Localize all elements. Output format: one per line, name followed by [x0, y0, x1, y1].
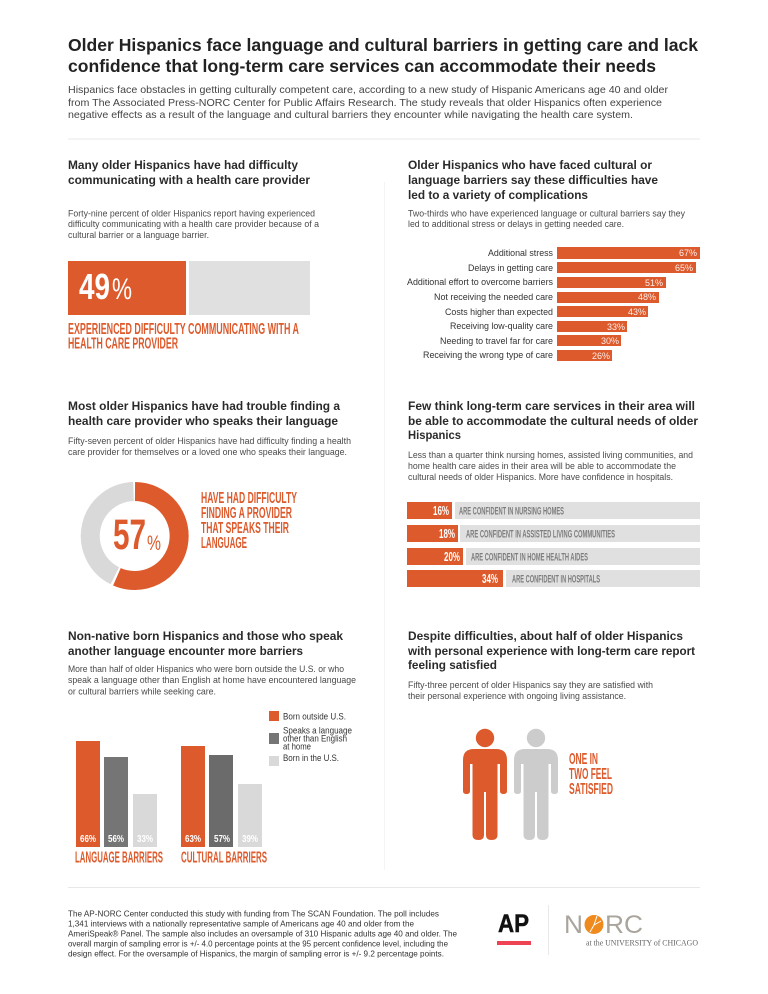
heading: satisfaction [407, 630, 695, 672]
column chart: language barriers: 33% [137, 833, 154, 845]
body text: two-thirds [408, 208, 686, 229]
column chart: language barriers: 56% [108, 833, 125, 845]
legend: Born in the U.S. [283, 753, 339, 763]
bar chart: complications [407, 247, 700, 361]
callout: one in two feel satisfied: TWO FEEL [569, 766, 612, 783]
footer methodology text: The AP-NORC Center conducted this study with funding from The SCAN Foundation. The poll includes [68, 908, 439, 918]
bar chart: complications: Receiving the wrong type of care [423, 350, 553, 360]
footer methodology text: design effect. For the oversample of Hispanics, the margin of sampling error is +/- 9.2 percentage points. [68, 948, 444, 958]
body text: more than half: or cultural barriers while seeking care. [68, 686, 216, 696]
heading: satisfaction: with personal experience with long-term care report [407, 645, 695, 658]
logo: NORC at the University of Chicago: at the UNIVERSITY of CHICAGO [586, 938, 698, 948]
stacked bars: confidence by facility: 18% [439, 527, 455, 541]
stacked bars: confidence by facility: ARE CONFIDENT IN HOSPITALS [512, 574, 600, 586]
legend [269, 711, 352, 766]
legend: Born outside U.S. [283, 712, 346, 722]
icon: satisfied person [463, 729, 507, 840]
bar chart: complications: 43% [628, 307, 646, 317]
callout: have had difficulty: HAVE HAD DIFFICULTY [201, 490, 297, 507]
heading: complications: language barriers say these difficulties have [408, 174, 659, 187]
bar chart: complications: 33% [607, 322, 625, 332]
stacked bars: confidence by facility: 20% [444, 550, 460, 564]
legend: at home [283, 742, 311, 752]
column chart: cultural barriers [181, 746, 267, 866]
bar chart: complications: Additional stress [488, 248, 554, 258]
body text: forty-nine percent: Forty-nine percent of older Hispanics report having experienced [68, 208, 315, 218]
logo: NORC at the University of Chicago: N [564, 911, 583, 939]
stacked bars: confidence by facility [407, 502, 700, 587]
logo: NORC at the University of Chicago: RC [605, 911, 643, 939]
callout: experienced difficulty [68, 321, 299, 352]
heading: satisfaction: Despite difficulties, about half of older Hispanics [408, 630, 683, 643]
callout: have had difficulty: FINDING A PROVIDER [201, 505, 292, 522]
progress bar: 49 percent: 49 [79, 266, 110, 307]
body text: less than a quarter: Less than a quarter think nursing homes, assisted living communities, and [408, 450, 693, 460]
footer methodology text: AmeriSpeak® Panel. The sample also includes an oversample of 310 Hispanic adults age 40 and older. The [68, 928, 457, 938]
heading: satisfaction: feeling satisfied [408, 659, 497, 672]
body text: two-thirds: Two-thirds who have experienced language or cultural barriers say they [408, 208, 686, 218]
body text: less than a quarter: home health care aides in their area will be able to accommodate the [408, 461, 676, 471]
heading: long-term care confidence: Few think long-term care services in their area will [408, 400, 695, 413]
progress bar: 49 percent [68, 261, 310, 315]
heading: difficulty communicating: Many older Hispanics have had difficulty [68, 159, 299, 172]
panel: satisfaction [407, 630, 695, 840]
body text: forty-nine percent: cultural barrier or a language barrier. [68, 230, 209, 240]
callout: experienced difficulty: EXPERIENCED DIFFICULTY COMMUNICATING WITH A [68, 321, 299, 338]
panel: finding a provider [68, 400, 351, 580]
body text: less than a quarter [408, 450, 693, 482]
title: Older Hispanics face language and cultural barriers in getting care and lack [68, 35, 698, 55]
body text: more than half: speak a language other than English at home have encountered language [68, 675, 356, 685]
panel: barriers by origin [68, 630, 356, 866]
bar chart: complications: Additional effort to overcome barriers [407, 277, 554, 287]
heading: complications: Older Hispanics who have faced cultural or [408, 159, 652, 172]
body text: two-thirds: led to additional stress or delays in getting needed care. [408, 219, 624, 229]
body text: forty-nine percent [68, 208, 319, 240]
body text: less than a quarter: cultural needs of older Hispanics. More have confidence in hospitals. [408, 472, 673, 482]
heading: barriers by origin [68, 630, 344, 658]
bar chart: complications: 26% [592, 351, 610, 361]
intro text [68, 85, 669, 121]
stacked bars: confidence by facility: 16% [433, 504, 449, 518]
heading: long-term care confidence: Hispanics [408, 429, 461, 442]
panel: difficulty communicating [68, 159, 319, 352]
stacked bars: confidence by facility: ARE CONFIDENT IN ASSISTED LIVING COMMUNITIES [466, 528, 615, 540]
bar chart: complications: 51% [645, 278, 663, 288]
column chart: language barriers [75, 741, 163, 866]
logo: NORC at the University of Chicago [564, 911, 698, 948]
body text: fifty-three percent: their personal experience with ongoing living assistance. [408, 691, 626, 701]
heading: complications [408, 159, 659, 202]
heading: long-term care confidence [408, 400, 698, 442]
heading: difficulty communicating: communicating with a health care provider [68, 174, 310, 187]
callout: have had difficulty: LANGUAGE [201, 535, 247, 552]
heading: finding a provider: health care provider who speaks their language [68, 415, 339, 428]
column chart: cultural barriers: 63% [185, 833, 202, 845]
body text: fifty-seven percent: care provider for themselves or a loved one who speaks their language. [68, 447, 347, 457]
donut chart: 57 percent: % [147, 532, 161, 555]
title: confidence that long-term care services can accommodate their needs [68, 56, 656, 76]
heading: complications: led to a variety of complications [408, 189, 588, 202]
bar chart: complications: Delays in getting care [468, 263, 553, 273]
bar chart: complications: Receiving low-quality care [450, 321, 553, 331]
column chart: cultural barriers: 57% [214, 833, 231, 845]
bar chart: complications: Needing to travel far for care [440, 336, 553, 346]
donut chart: 57 percent [90, 492, 179, 580]
icon: unsatisfied person [514, 729, 558, 840]
heading: finding a provider: Most older Hispanics have had trouble finding a [68, 400, 341, 413]
logo: AP: AP [498, 910, 529, 938]
legend: other than English [283, 734, 347, 744]
title [68, 35, 698, 76]
footer methodology text [68, 908, 457, 958]
stacked bars: confidence by facility: ARE CONFIDENT IN NURSING HOMES [459, 506, 564, 518]
footer methodology text: 1,341 interviews with a nationally representative sample of Americans age 40 and older from the [68, 918, 414, 928]
body text: fifty-seven percent: Fifty-seven percent of older Hispanics have had difficulty finding a health [68, 436, 351, 446]
callout: one in two feel satisfied: SATISFIED [569, 781, 613, 798]
bar chart: complications: 65% [675, 263, 693, 273]
heading: long-term care confidence: be able to accommodate the cultural needs of older [408, 415, 698, 428]
intro text: Hispanics face obstacles in getting culturally competent care, according to a new study of Hispanic Americans age 40 and older [68, 85, 669, 96]
bar chart: complications: Costs higher than expected [445, 307, 553, 317]
panel: long-term care confidence [407, 400, 700, 587]
legend: Speaks a language [283, 726, 352, 736]
callout: have had difficulty [201, 490, 297, 552]
callout: experienced difficulty: HEALTH CARE PROVIDER [68, 336, 178, 352]
bar chart: complications: 48% [638, 292, 656, 302]
heading: finding a provider [68, 400, 341, 428]
donut chart: 57 percent: 57 [113, 511, 146, 559]
bar chart: complications: 30% [601, 336, 619, 346]
column chart: cultural barriers: CULTURAL BARRIERS [181, 850, 267, 866]
heading: barriers by origin: another language encounter more barriers [68, 645, 303, 658]
stacked bars: confidence by facility: ARE CONFIDENT IN HOME HEALTH AIDES [471, 552, 588, 564]
callout: have had difficulty: THAT SPEAKS THEIR [201, 520, 289, 537]
body text: forty-nine percent: difficulty communicating with a health care provider because of a [68, 219, 319, 229]
body text: more than half: More than half of older Hispanics who were born outside the U.S. or who [68, 664, 344, 674]
panel: complications [407, 159, 700, 361]
body text: more than half [68, 664, 356, 696]
callout: one in two feel satisfied: ONE IN [569, 751, 598, 768]
column chart: cultural barriers: 39% [242, 833, 259, 845]
body text: fifty-three percent: Fifty-three percent of older Hispanics say they are satisfied with [408, 680, 653, 690]
intro text: from The Associated Press-NORC Center for Public Affairs Research. The study reveals that older Hispanics often experience [68, 98, 662, 109]
column chart: language barriers: 66% [80, 833, 97, 845]
footer methodology text: overall margin of sampling error is +/- 4.0 percentage points at the 95 percent confidence level, including the [68, 938, 448, 948]
progress bar: 49 percent: % [112, 273, 132, 306]
heading: barriers by origin: Non-native born Hispanics and those who speak [68, 630, 344, 643]
column chart: language barriers: LANGUAGE BARRIERS [75, 850, 163, 866]
bar chart: complications: Not receiving the needed care [434, 292, 553, 302]
intro text: negative effects as a result of the language and cultural barriers they encounter while navigating the health care system. [68, 110, 633, 121]
bar chart: complications: 67% [679, 248, 697, 258]
callout: one in two feel satisfied [569, 751, 613, 798]
heading: difficulty communicating [68, 159, 310, 187]
body text: fifty-three percent [408, 680, 653, 701]
stacked bars: confidence by facility: 34% [482, 572, 498, 586]
body text: fifty-seven percent [68, 436, 351, 457]
